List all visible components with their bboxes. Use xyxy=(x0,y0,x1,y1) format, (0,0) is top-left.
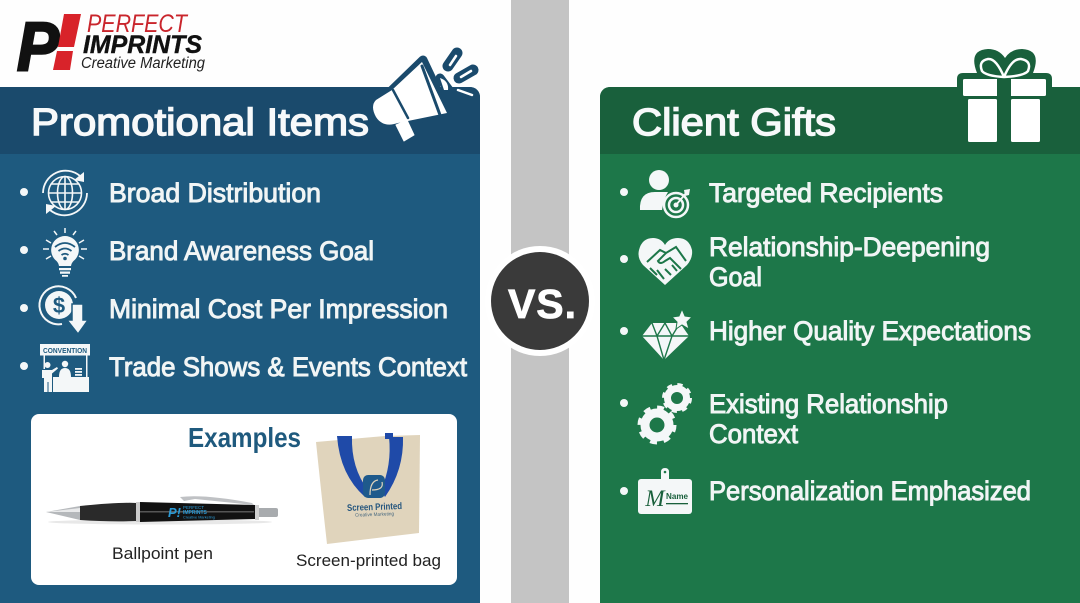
panel header: promotional items xyxy=(0,87,480,154)
icon: heart handshake xyxy=(638,238,692,285)
badge: vs. xyxy=(485,246,595,356)
image: screen-printed bag xyxy=(316,433,420,544)
image: screen-printed bag: Creative Marketing xyxy=(355,511,394,519)
text: existing relationship context: Context xyxy=(709,419,799,449)
icon: name badge: Name xyxy=(666,491,688,501)
bullet: brand awareness goal xyxy=(20,246,28,254)
icon: dollar with down arrow xyxy=(39,286,88,334)
logo: PERFECT xyxy=(87,10,188,38)
bullet: targeted recipients xyxy=(620,188,628,196)
image: ballpoint pen xyxy=(46,496,278,524)
icon: globe with arrows xyxy=(43,171,87,215)
text: minimal cost per impression: Minimal Cost Per Impression xyxy=(109,294,448,324)
text: relationship-deepening goal xyxy=(709,232,990,292)
image: screen-printed bag: Screen Printed xyxy=(347,501,402,514)
icon: convention booth xyxy=(40,344,90,392)
label: ballpoint pen: Ballpoint pen xyxy=(112,544,213,563)
text: relationship-deepening goal: Relationship-Deepening xyxy=(709,232,990,262)
icon: gears xyxy=(640,385,690,442)
text: targeted recipients: Targeted Recipients xyxy=(709,178,943,208)
heading: examples: Examples xyxy=(188,422,301,453)
text: existing relationship context xyxy=(709,389,948,449)
icon: convention booth: CONVENTION xyxy=(43,346,87,355)
icon: light bulb with wifi xyxy=(43,228,87,277)
logo: P xyxy=(17,8,60,85)
badge: vs.: VS. xyxy=(508,281,576,327)
text: brand awareness goal: Brand Awareness Goal xyxy=(109,236,374,266)
panel: examples xyxy=(31,414,457,585)
text: broad distribution: Broad Distribution xyxy=(109,178,321,208)
logo xyxy=(17,8,205,85)
text: relationship-deepening goal: Goal xyxy=(709,262,762,292)
bullet: existing relationship context xyxy=(620,399,628,407)
icon: name badge xyxy=(638,468,692,514)
image: ballpoint pen: P! xyxy=(168,505,182,520)
text: existing relationship context: Existing Relationship xyxy=(709,389,948,419)
bullet: broad distribution xyxy=(20,188,28,196)
label: screen-printed bag: Screen-printed bag xyxy=(296,551,441,570)
icon: person with target xyxy=(640,170,690,217)
bullet: personalization emphasized xyxy=(620,487,628,495)
image: ballpoint pen: PERFECT xyxy=(183,505,204,510)
bullet: trade shows and events context xyxy=(20,362,28,370)
image: ballpoint pen: IMPRINTS xyxy=(183,510,208,516)
heading: promotional items: Promotional Items xyxy=(31,102,369,144)
logo: IMPRINTS xyxy=(83,31,202,59)
panel: client gifts xyxy=(600,87,1080,603)
logo: Creative Marketing xyxy=(81,55,205,72)
icon: megaphone xyxy=(373,53,473,142)
text: higher quality expectations: Higher Quality Expectations xyxy=(709,316,1031,346)
panel: promotional items xyxy=(0,87,480,603)
bullet: relationship-deepening goal xyxy=(620,255,628,263)
icon: name badge: M xyxy=(644,486,666,511)
heading: client gifts: Client Gifts xyxy=(632,102,836,144)
panel header: client gifts xyxy=(600,87,1080,154)
icon: diamond with star xyxy=(642,309,692,360)
icon: gift box xyxy=(957,49,1052,142)
image: ballpoint pen: Creative Marketing xyxy=(183,516,215,520)
text: personalization emphasized: Personalization Emphasized xyxy=(709,476,1031,506)
icon: dollar with down arrow: $ xyxy=(53,293,65,318)
bullet: minimal cost per impression xyxy=(20,304,28,312)
text: trade shows and events context: Trade Shows & Events Context xyxy=(109,352,468,382)
bullet: higher quality expectations xyxy=(620,327,628,335)
center divider strip xyxy=(511,0,569,603)
